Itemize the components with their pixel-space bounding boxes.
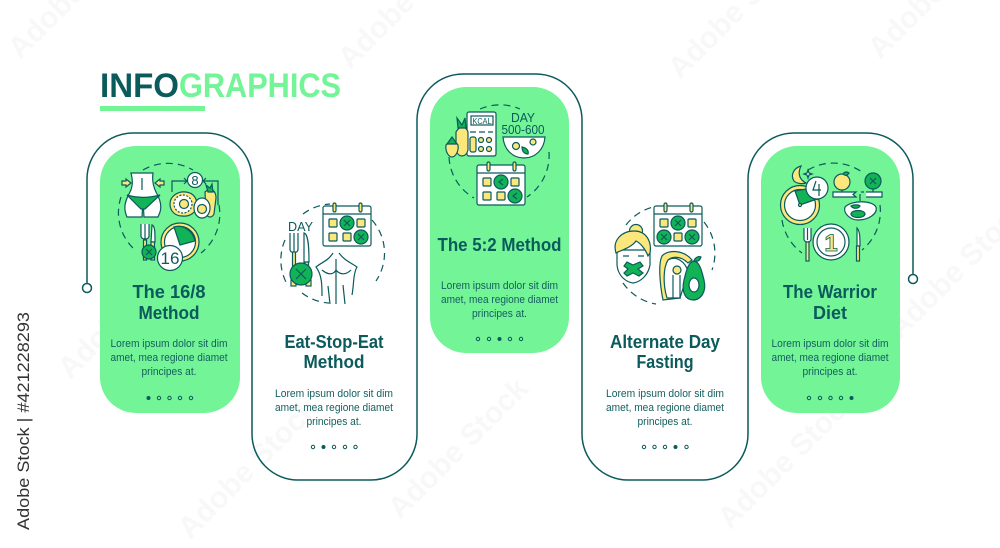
text block: Lorem ipsum dolor sit dim [441,280,558,292]
text block: Lorem ipsum dolor sit dim [772,338,888,350]
panel: The 5:2 Method [430,87,569,353]
title: INFO [100,67,179,105]
text block: Lorem ipsum dolor sit dim [110,338,228,350]
text block: amet, mea regione diamet [441,294,558,306]
panel: Eat-Stop-Eat Method [275,203,393,449]
panel: Alternate Day Fasting [606,203,724,449]
icon: clock, food and plate [780,163,882,261]
heading: Diet [813,303,847,323]
text block: amet, mea regione diamet [606,402,724,414]
text block: principes at. [142,366,196,378]
icon: calculator, food and calendar: KCAL [472,117,492,126]
text block [606,388,724,428]
panel: The 16/8 Method [100,146,240,413]
text block: amet, mea regione diamet [275,402,393,414]
stock id label: Adobe Stock | #421228293 [14,312,33,530]
icon: face, calendar, salmon and avocado [615,203,715,304]
text block: amet, mea regione diamet [772,352,888,364]
icon: calculator, food and calendar [446,105,549,205]
icon: calculator, food and calendar: DAY [511,110,535,125]
heading [284,332,384,372]
text block [441,280,558,320]
heading: Method [138,303,200,323]
text block: principes at. [306,416,362,428]
icon: waist, meal plate and clock: 16 [161,249,179,268]
icon: calendar, cutlery and torso: DAY [288,219,313,234]
title: GRAPHICS [179,67,341,105]
pagination dots [476,337,523,341]
text block: principes at. [472,308,527,320]
watermark pattern: Adobe Stock [712,382,865,535]
heading: Eat-Stop-Eat [284,332,384,352]
watermark pattern: Adobe Stock [172,392,325,545]
serpentine outline connecting the panels [82,74,918,480]
heading: The 5:2 Method [438,235,562,255]
heading: The Warrior [783,282,877,302]
icon: clock, food and plate: 1 [824,230,838,257]
heading: Fasting [636,352,694,372]
pagination dots [642,445,688,449]
text block: principes at. [802,366,858,378]
icon: calculator, food and calendar: 500-600 [502,122,544,137]
heading: The 16/8 [132,282,206,302]
panel: The Warrior Diet [761,146,900,413]
icon: waist, meal plate and clock: 8 [191,173,199,188]
text block [275,388,393,428]
watermark pattern: Adobe Stock [382,372,535,525]
text block: Lorem ipsum dolor sit dim [606,388,724,400]
pagination dots [807,396,853,400]
watermark pattern: Adobe Stock [52,232,205,385]
heading [783,282,877,323]
text block [772,338,888,378]
text block [110,338,228,378]
pagination dots [311,445,357,449]
text block: Lorem ipsum dolor sit dim [275,388,393,400]
heading: Alternate Day [610,332,720,352]
pagination dots [147,396,193,400]
icon: calendar, cutlery and torso [281,203,385,304]
heading [132,282,206,323]
heading: Method [304,352,364,372]
text block: amet, mea regione diamet [110,352,228,364]
icon: waist, meal plate and clock [118,163,220,270]
heading [610,332,720,372]
text block: principes at. [638,416,692,428]
title [100,67,341,111]
